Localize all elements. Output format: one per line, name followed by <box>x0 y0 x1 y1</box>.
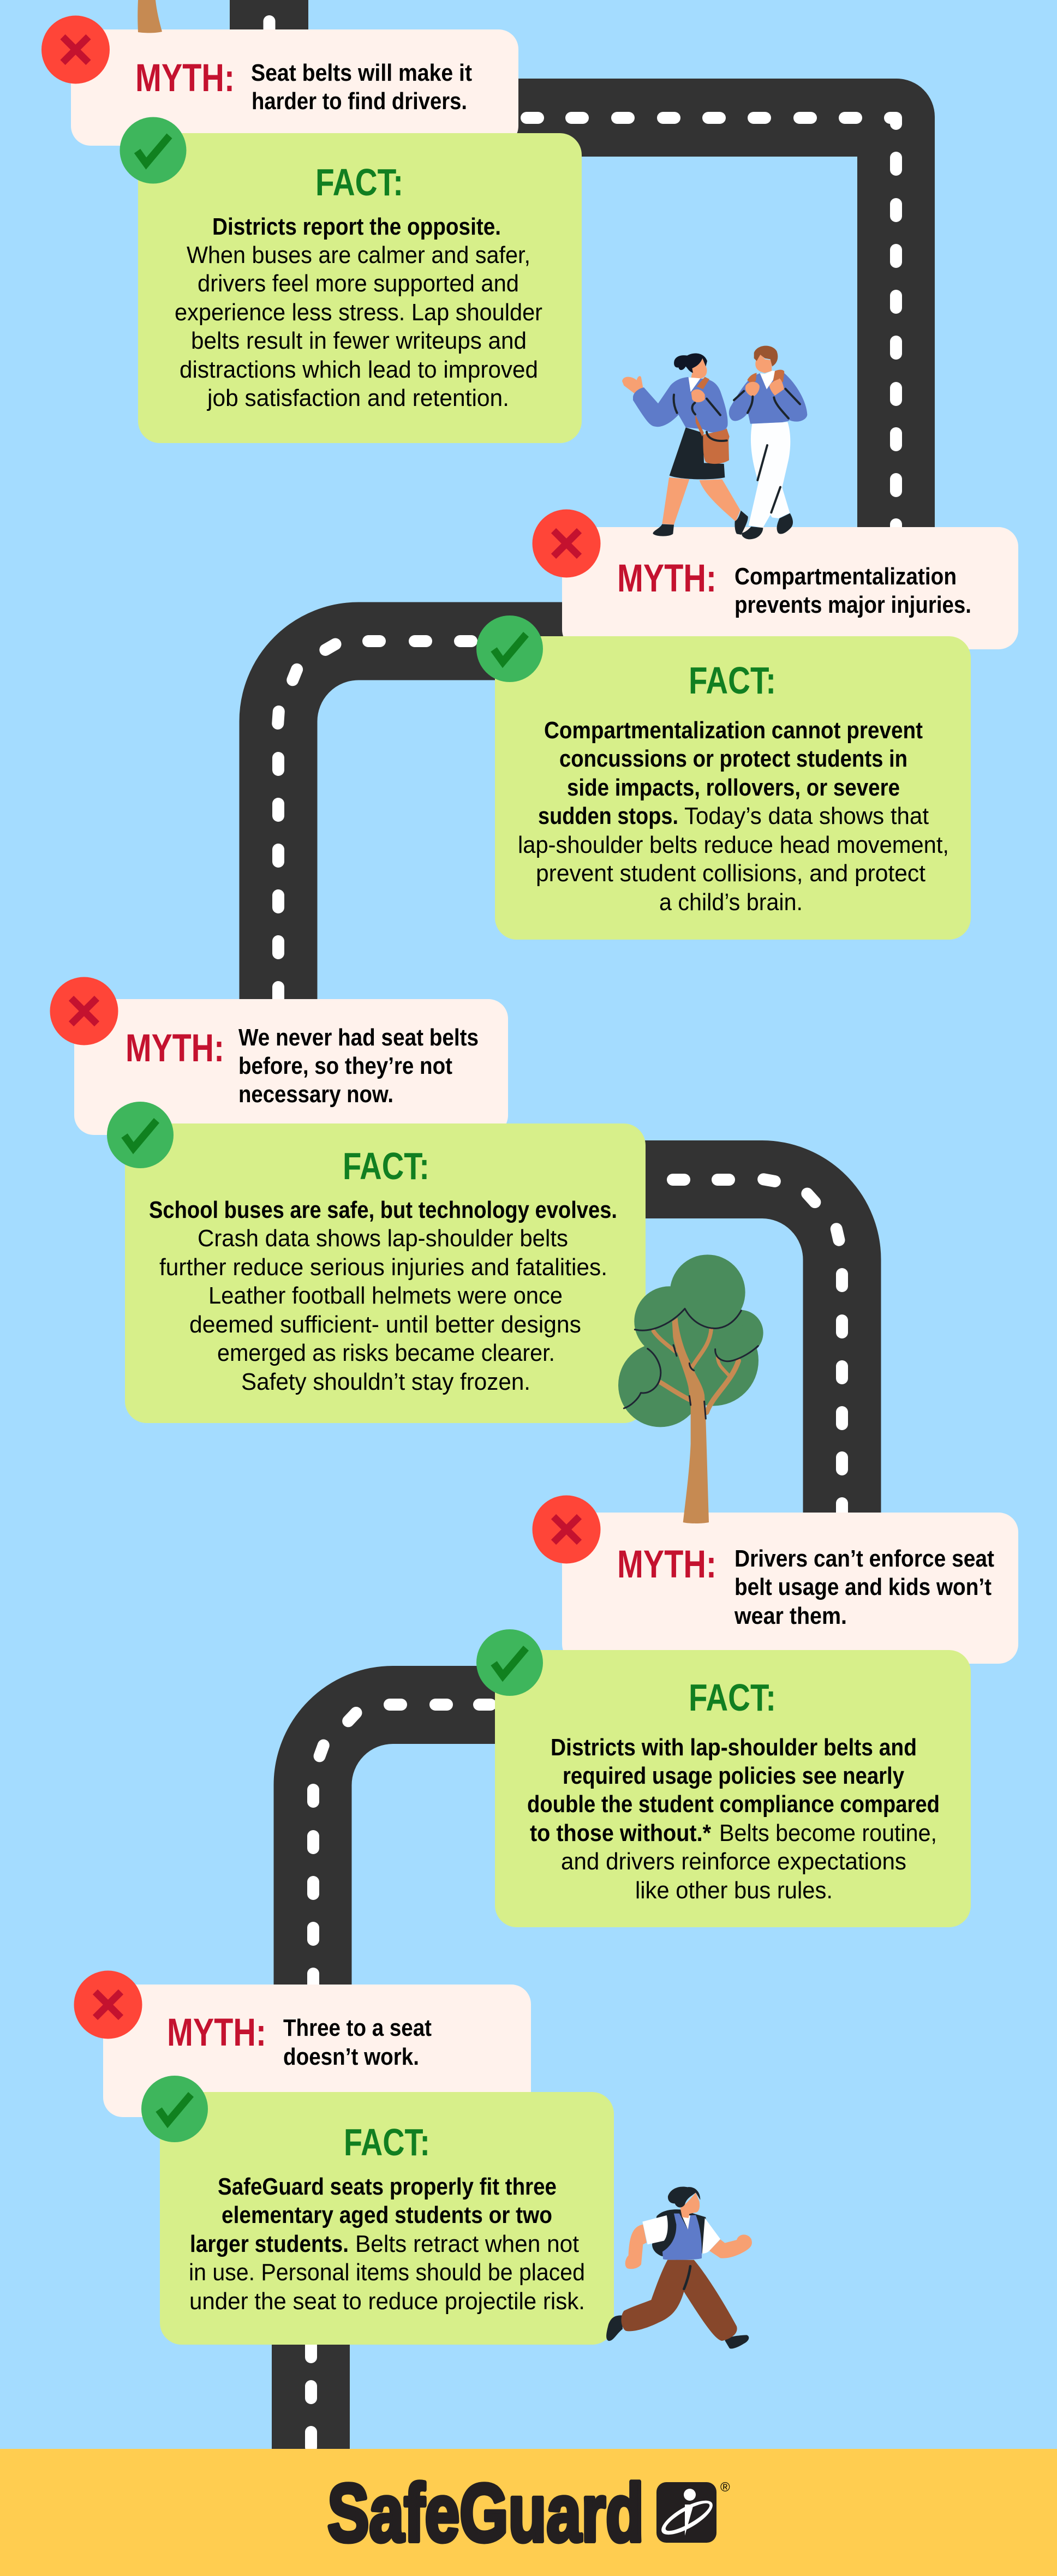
illustration: two students walking <box>622 346 807 539</box>
myth 1 statement: Seat belts will make it <box>251 59 472 86</box>
fact 1 body: When buses are calmer and safer, <box>187 242 530 268</box>
panel: myth 3 <box>50 977 508 1135</box>
fact 5 body <box>189 2173 585 2315</box>
fact 2 heading: FACT: <box>689 659 776 702</box>
fact 1 body <box>175 213 542 411</box>
road segment: third bend <box>628 1173 848 1528</box>
fact 1 body: experience less stress. Lap shoulder <box>175 299 542 326</box>
fact 2 body: side impacts, rollovers, or severe <box>567 774 900 801</box>
myth 5 statement: Three to a seat <box>283 2015 432 2041</box>
pants <box>622 2260 737 2341</box>
icon: tree trunk base at top edge <box>138 0 162 33</box>
panel: fact 3 <box>107 1102 646 1423</box>
fact 2 body <box>518 717 949 916</box>
fact 5 heading: FACT: <box>344 2121 430 2163</box>
fact 2 body: sudden stops. <box>538 803 678 829</box>
head and hair <box>668 2186 700 2218</box>
fact 4 body <box>527 1734 940 1904</box>
myth 4 statement: Drivers can’t enforce seat <box>734 1545 994 1572</box>
fact 4 heading: FACT: <box>689 1676 776 1719</box>
myth 4 statement: wear them. <box>734 1603 847 1629</box>
fact 5 body: larger students. <box>190 2231 349 2257</box>
panel: myth 1 <box>41 15 518 146</box>
illustration: tree <box>618 1254 763 1523</box>
tree branches <box>653 1329 738 1412</box>
left arm and sleeve <box>625 2215 668 2269</box>
fact 1 box <box>138 133 582 443</box>
fact 5 body: Belts retract when not <box>355 2231 579 2257</box>
fact 3 heading: FACT: <box>343 1145 429 1187</box>
myth 4 statement <box>734 1545 994 1629</box>
icon: green check <box>476 615 543 682</box>
fact 2 body: Today’s data shows that <box>684 803 929 829</box>
myth 2 label: MYTH: <box>617 557 716 600</box>
fact 4 body: Belts become routine, <box>719 1820 937 1846</box>
shoes <box>606 2315 749 2348</box>
right sleeve and arm <box>702 2218 752 2258</box>
fact 1 heading: FACT: <box>315 161 403 204</box>
fact 4 body: required usage policies see nearly <box>563 1762 904 1789</box>
road segment: fourth bend <box>307 1699 513 1997</box>
myth 5 statement <box>283 2015 432 2070</box>
fact 4 body: like other bus rules. <box>635 1877 833 1904</box>
backpack <box>652 2209 707 2256</box>
fact 3 box <box>125 1123 646 1423</box>
tree trunk <box>672 1318 709 1523</box>
registered mark: ® <box>720 2480 730 2495</box>
myth 2 statement: prevents major injuries. <box>734 591 971 618</box>
fact 3 body: further reduce serious injuries and fatalities. <box>159 1254 607 1281</box>
fact 2 box <box>495 636 971 940</box>
myth 4 statement: belt usage and kids won’t <box>734 1574 992 1600</box>
fact 2 body: lap-shoulder belts reduce head movement, <box>518 832 949 858</box>
fact 1 body: job satisfaction and retention. <box>206 385 509 411</box>
icon: green check <box>141 2076 208 2142</box>
myth 4 box <box>562 1513 1018 1664</box>
panel: myth 4 <box>533 1495 1018 1664</box>
panel: fact 1 <box>120 117 582 443</box>
logo wordmark: SafeGuard <box>327 2467 644 2559</box>
SafeGuard logo <box>327 2467 730 2559</box>
fact 1 body: distractions which lead to improved <box>180 356 538 383</box>
fact 1 body: belts result in fewer writeups and <box>191 327 527 354</box>
fact 4 body: to those without.* <box>530 1820 712 1846</box>
logo mark <box>656 2482 717 2543</box>
tree canopy <box>618 1254 763 1427</box>
myth 5 statement: doesn’t work. <box>283 2043 419 2070</box>
fact 5 body: in use. Personal items should be placed <box>189 2259 585 2286</box>
fact 4 body: double the student compliance compared <box>527 1791 940 1818</box>
icon: red x <box>50 977 118 1045</box>
fact 5 body: elementary aged students or two <box>222 2202 552 2228</box>
myth 1 statement <box>251 59 472 115</box>
fact 2 body: concussions or protect students in <box>559 745 907 772</box>
woman student <box>622 354 748 536</box>
fact 2 body: prevent student collisions, and protect <box>536 860 925 887</box>
winding road <box>230 0 935 2453</box>
road segment: final stretch <box>272 2335 350 2453</box>
fact 2 body: Compartmentalization cannot prevent <box>544 717 923 744</box>
myth 1 box <box>71 29 518 146</box>
fact 1 body: Districts report the opposite. <box>212 213 501 240</box>
myth 3 label: MYTH: <box>126 1027 224 1070</box>
fact 5 box <box>160 2092 614 2345</box>
fact 3 body: emerged as risks became clearer. <box>217 1340 555 1366</box>
fact 4 body: and drivers reinforce expectations <box>561 1848 906 1875</box>
myth 2 statement: Compartmentalization <box>734 563 957 590</box>
panel: myth 2 <box>533 510 1018 649</box>
myth 5 box <box>103 1985 531 2117</box>
myth 3 statement <box>238 1024 479 1108</box>
fact 3 body: School buses are safe, but technology evolves. <box>149 1197 617 1223</box>
vest <box>662 2214 702 2260</box>
myth 3 statement: necessary now. <box>238 1081 393 1108</box>
fact 3 body: Safety shouldn’t stay frozen. <box>241 1368 530 1395</box>
icon: green check <box>476 1629 543 1696</box>
fact 5 body: SafeGuard seats properly fit three <box>218 2173 557 2200</box>
icon: red x <box>41 15 110 84</box>
myth 1 label: MYTH: <box>135 57 235 100</box>
illustration: running student <box>606 2186 752 2348</box>
myth 2 statement <box>734 563 971 618</box>
myth 5 label: MYTH: <box>167 2011 266 2054</box>
fact 3 body <box>149 1197 617 1395</box>
icon: green check <box>120 117 187 183</box>
icon: red x <box>533 510 600 577</box>
fact 4 body: Districts with lap-shoulder belts and <box>551 1734 917 1761</box>
fact 3 body: Crash data shows lap-shoulder belts <box>198 1225 568 1252</box>
myth 3 box <box>74 999 508 1135</box>
icon: red x <box>74 1971 142 2039</box>
panel: fact 2 <box>476 615 971 940</box>
icon: green check <box>107 1102 174 1168</box>
myth 4 label: MYTH: <box>617 1543 716 1586</box>
panel: myth 5 <box>74 1971 531 2117</box>
panel: fact 4 <box>476 1629 971 1927</box>
road segment: top entry <box>230 0 308 39</box>
myth 3 statement: before, so they’re not <box>238 1053 452 1079</box>
footer band <box>0 2449 1057 2576</box>
myth 3 statement: We never had seat belts <box>238 1024 479 1051</box>
fact 1 body: drivers feel more supported and <box>198 270 519 297</box>
myth 1 statement: harder to find drivers. <box>252 88 467 115</box>
myth 2 box <box>562 527 1018 649</box>
road segment: first bend <box>507 79 935 542</box>
man student <box>729 346 807 539</box>
icon: red x <box>533 1495 600 1564</box>
fact 5 body: under the seat to reduce projectile risk. <box>189 2288 585 2315</box>
fact 4 box <box>495 1650 971 1927</box>
road segment: second bend <box>271 635 578 1015</box>
fact 3 body: Leather football helmets were once <box>208 1282 563 1309</box>
fact 2 body: a child’s brain. <box>659 889 803 916</box>
panel: fact 5 <box>141 2076 614 2345</box>
tree outlines <box>624 1308 758 1419</box>
fact 3 body: deemed sufficient- until better designs <box>189 1311 581 1338</box>
